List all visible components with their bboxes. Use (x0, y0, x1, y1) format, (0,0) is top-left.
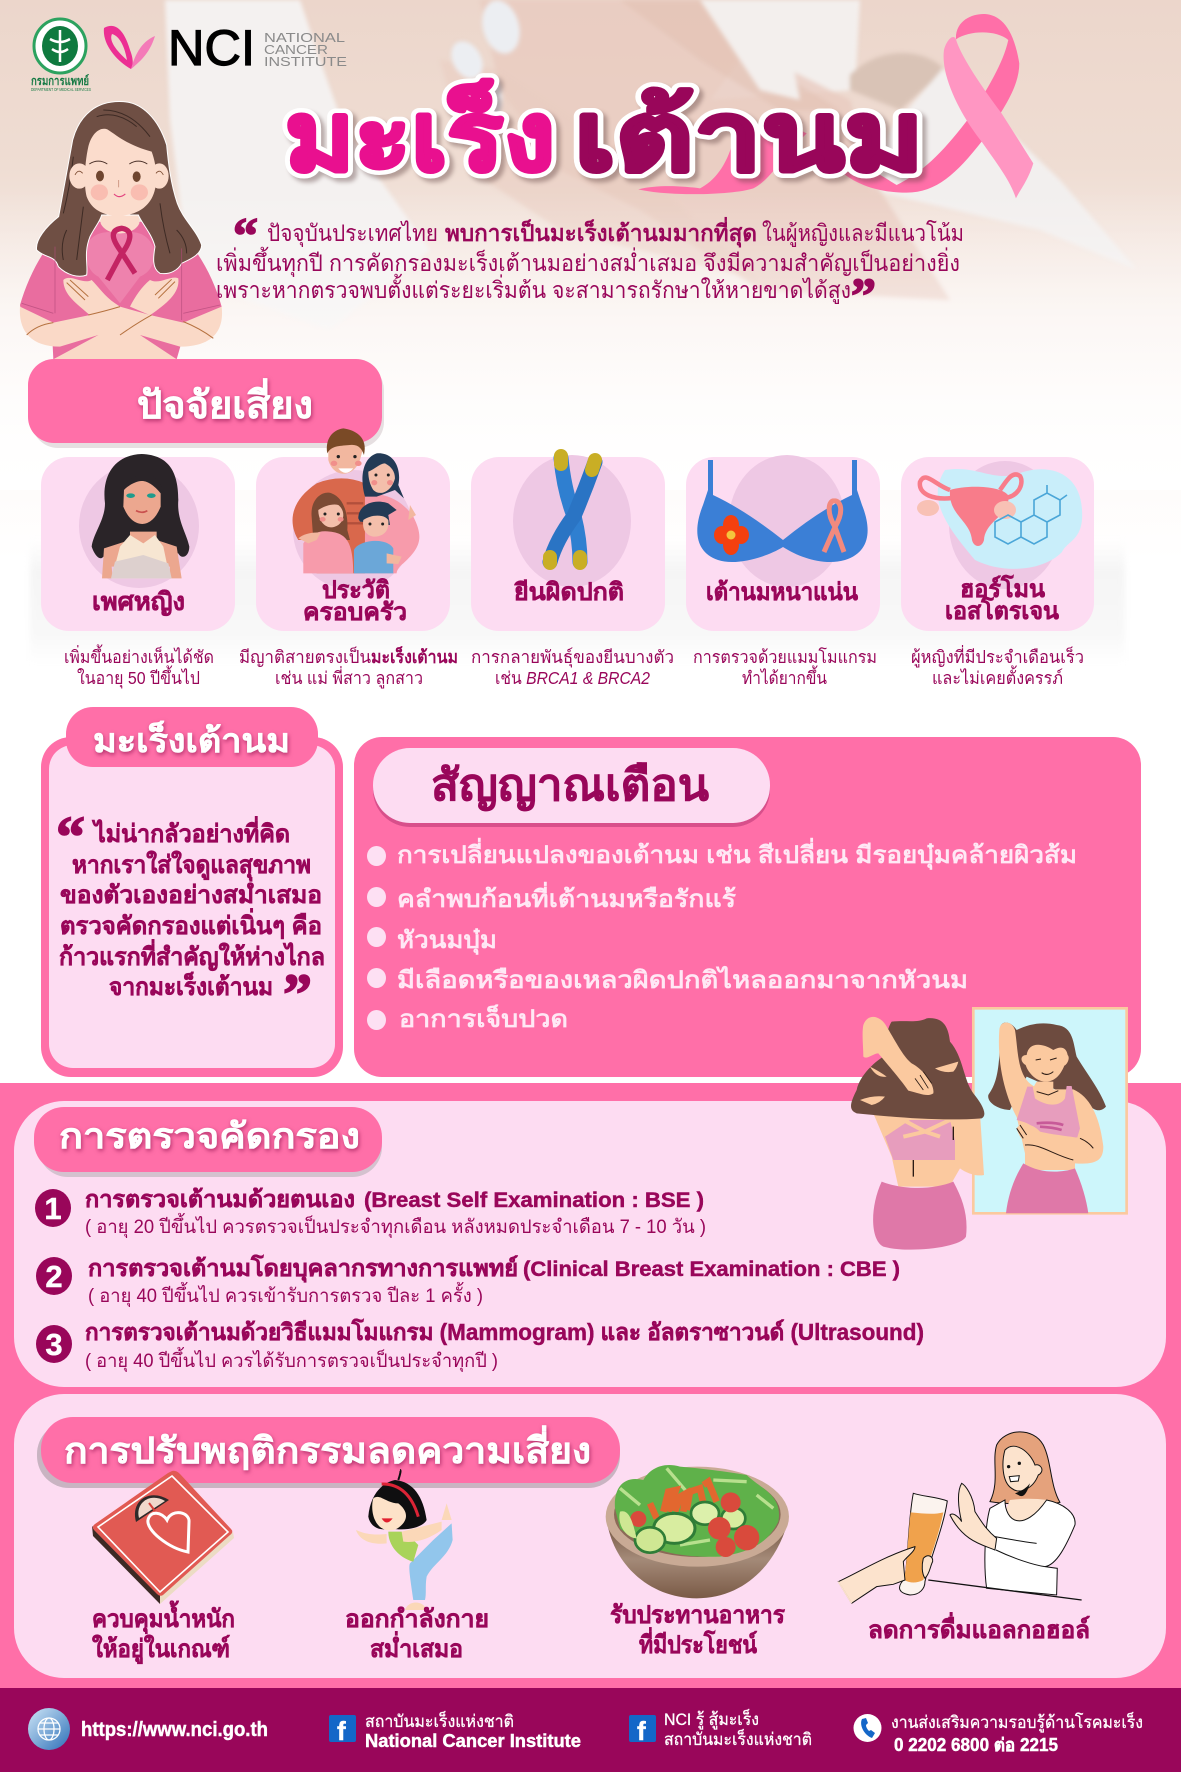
panel: risk card estrogen hormone: ฮอร์โมน (960, 574, 1046, 603)
screening item 1: 1 (44, 1191, 62, 1226)
facebook page 2: NCI รู้ สู้มะเร็ง (664, 1708, 759, 1730)
warning list (367, 837, 1077, 1033)
heading tab (66, 707, 318, 767)
phone contact: งานส่งเสริมความรอบรู้ด้านโรคมะเร็ง (891, 1711, 1143, 1733)
panel: risk card abnormal gene: ยีนผิดปกติ (514, 579, 624, 606)
panel: risk card family history: ครอบครัว (303, 599, 407, 626)
quote text: ไม่น่ากลัวอย่างที่คิด (91, 816, 290, 848)
risk captions: มะเร็งเต้านม (371, 645, 458, 667)
title: มะเร็ง (285, 79, 555, 191)
screening item 2: การตรวจเต้านมโดยบุคลากรทางการแพทย์ (88, 1254, 518, 1283)
lifestyle caption: control weight (92, 1600, 235, 1664)
risk captions: ในอายุ 50 ปีขึ้นไป (77, 665, 200, 689)
lifestyle caption: exercise: ออกกำลังกาย (345, 1606, 489, 1633)
panel: risk card female (41, 454, 235, 631)
logo: NCI National Cancer Institute: NCI (168, 20, 255, 76)
logo: Ministry of Public Health / Department of Medical Services: กรมการแพทย์ (31, 74, 89, 88)
quote text: ” (283, 962, 312, 1027)
icon: pink ribbon (638, 14, 1033, 198)
warning list: คลำพบก้อนที่เต้านมหรือรักแร้ (397, 881, 736, 913)
intro paragraph: พบการเป็นมะเร็งเต้านมมากที่สุด (445, 216, 757, 248)
lifestyle caption: control weight: ควบคุมน้ำหนัก (92, 1600, 235, 1635)
quote text: จากมะเร็งเต้านม (109, 971, 273, 1001)
screening item 1 (35, 1186, 706, 1239)
risk captions: เพิ่มขึ้นอย่างเห็นได้ชัด (64, 644, 214, 667)
title: มะเร็ง (285, 79, 555, 191)
quote text: หากเราใส่ใจดูแลสุขภาพ (72, 850, 311, 881)
warning list: มีเลือดหรือของเหลวผิดปกติไหลออกมาจากหัวนม (397, 965, 968, 994)
title: เต้านม (574, 84, 924, 191)
heading pill (34, 1107, 382, 1177)
facebook page 2 (629, 1708, 812, 1749)
icon: family (293, 428, 419, 573)
intro paragraph: “ (233, 207, 258, 263)
phone contact: 0 2202 6800 ต่อ 2215 (894, 1735, 1058, 1755)
facebook page 1: สถาบันมะเร็งแห่งชาติ (365, 1710, 514, 1731)
warning list: หัวนมบุ๋ม (397, 927, 497, 956)
icon: woman refusing beer (838, 1432, 1082, 1603)
icon: bathroom scale (92, 1471, 234, 1604)
lifestyle caption: healthy food: รับประทานอาหาร (610, 1602, 786, 1629)
risk captions: ทำได้ยากขึ้น (742, 665, 827, 688)
footer (0, 1688, 1181, 1772)
risk captions: การตรวจด้วยแมมโมแกรม (693, 647, 877, 667)
lifestyle caption: exercise (345, 1606, 489, 1663)
icon: girl doing yoga pose (356, 1470, 453, 1610)
lifestyle caption: exercise: สม่ำเสมอ (370, 1631, 463, 1663)
screening item 3 (36, 1318, 924, 1373)
heading pill (373, 748, 770, 827)
logo: NCI National Cancer Institute: CANCER (264, 43, 328, 57)
logo: Ministry of Public Health / Department of Medical Services: DEPARTMENT OF MEDICAL SERVICES (31, 87, 91, 92)
heading pill (37, 1417, 620, 1488)
panel: risk card family history: ประวัติ (322, 577, 390, 604)
screening item 2 (36, 1254, 900, 1308)
facebook page 1 (329, 1710, 581, 1751)
logo: Ministry of Public Health / Department of Medical Services (31, 19, 91, 92)
title: เต้านม (574, 84, 924, 191)
lifestyle caption: control weight: ให้อยู่ในเกณฑ์ (92, 1634, 230, 1664)
screening item 3: การตรวจเต้านมด้วยวิธีแมมโมแกรม (Mammogram) และ อัลตราซาวนด์ (Ultrasound) (85, 1318, 924, 1345)
screening item 3: 3 (45, 1327, 63, 1362)
intro paragraph: ” (851, 267, 876, 323)
panel: screening (14, 1101, 1166, 1387)
facebook page 2: f (637, 1716, 646, 1746)
screening item 2: 2 (45, 1259, 63, 1294)
heading: risk factors: ปัจจัยเสี่ยง (137, 378, 313, 427)
risk captions: การกลายพันธุ์ของยีนบางตัว (471, 647, 674, 668)
panel: risk card estrogen hormone (901, 457, 1094, 631)
screening item 1: การตรวจเต้านมด้วยตนเอง (85, 1186, 355, 1212)
intro paragraph: ปัจจุบันประเทศไทย (267, 220, 438, 247)
warning list: อาการเจ็บปวด (399, 1004, 568, 1033)
logo: NCI National Cancer Institute (104, 20, 347, 76)
icon: chromosome (550, 456, 595, 563)
phone contact (854, 1711, 1143, 1755)
risk captions: มีญาติสายตรงเป็น (239, 646, 371, 667)
heading pill: การปรับพฤติกรรมลดความเสี่ยง (64, 1425, 591, 1471)
icon: uterus and molecule (917, 469, 1082, 569)
intro paragraph: เพิ่มขึ้นทุกปี การคัดกรองมะเร็งเต้านมอย่างสม่ำเสมอ จึงมีความสำคัญเป็นอย่างยิ่ง (216, 247, 960, 277)
risk captions: เช่น แม่ พี่สาว ลูกสาว (275, 666, 423, 689)
quote text: ตรวจคัดกรองแต่เนิ่นๆ คือ (60, 908, 322, 940)
intro paragraph: เพราะหากตรวจพบตั้งแต่ระยะเริ่มต้น จะสามารถรักษาให้หายขาดได้สูง (216, 274, 851, 304)
lifestyle caption: healthy food: ที่มีประโยชน์ (639, 1627, 757, 1659)
panel: risk card dense breast: เต้านมหนาแน่น (706, 579, 859, 606)
screening item 2: (Clinical Breast Examination : CBE ) (523, 1258, 900, 1281)
heading: risk factors (28, 359, 384, 448)
screening item 2: ( อายุ 40 ปีขึ้นไป ควรเข้ารับการตรวจ ปีละ 1 ครั้ง ) (88, 1282, 483, 1308)
website (28, 1708, 268, 1750)
risk captions (64, 644, 1084, 689)
illustration: woman with crossed arms and ribbon (20, 102, 222, 359)
risk captions: เช่น BRCA1 & BRCA2 (495, 668, 650, 688)
title (285, 79, 924, 191)
panel: risk card abnormal gene (471, 455, 665, 631)
panel: risk card female: เพศหญิง (92, 588, 185, 616)
panel: risk card dense breast (686, 455, 880, 631)
intro paragraph: ในผู้หญิงและมีแนวโน้ม (762, 220, 964, 247)
facebook page 1: f (337, 1716, 346, 1746)
heading pill: การตรวจคัดกรอง (59, 1117, 360, 1156)
panel: risk card family history (256, 428, 450, 631)
icon: blue bra with flower and ribbon (697, 460, 868, 562)
quote text (56, 804, 325, 1027)
panel: warning signs (354, 737, 1141, 1077)
panel: breast cancer quote (41, 707, 343, 1077)
heading pill: สัญญาณเตือน (431, 761, 709, 811)
icon: woman portrait (92, 454, 189, 578)
heading tab: มะเร็งเต้านม (93, 720, 290, 759)
quote text: ของตัวเองอย่างสม่ำเสมอ (60, 877, 322, 909)
lifestyle caption: reduce alcohol: ลดการดื่มแอลกอฮอล์ (868, 1612, 1090, 1644)
quote text: “ (56, 804, 85, 869)
screening item 1: (Breast Self Examination : BSE ) (364, 1189, 704, 1212)
warning list: การเปลี่ยนแปลงของเต้านม เช่น สีเปลี่ยน มีรอยบุ๋มคล้ายผิวส้ม (397, 837, 1077, 871)
screening item 3: ( อายุ 40 ปีขึ้นไป ควรได้รับการตรวจเป็นประจำทุกปี ) (85, 1347, 498, 1373)
pink lower background band (0, 1083, 1181, 1689)
screening item 1: ( อายุ 20 ปีขึ้นไป ควรตรวจเป็นประจำทุกเดือน หลังหมดประจำเดือน 7 - 10 วัน ) (85, 1213, 706, 1239)
quote text: ก้าวแรกที่สำคัญให้ห่างไกล (59, 939, 325, 971)
risk captions: ผู้หญิงที่มีประจำเดือนเร็ว (911, 645, 1084, 668)
panel: lifestyle (14, 1394, 1166, 1678)
intro paragraph (216, 207, 964, 323)
illustration: self breast exam, woman and mirror (851, 1008, 1127, 1250)
lifestyle caption: healthy food (610, 1602, 786, 1659)
facebook page 1: National Cancer Institute (365, 1731, 581, 1751)
background photo: hands on breast, faded (0, 0, 1181, 665)
facebook page 2: สถาบันมะเร็งแห่งชาติ (664, 1728, 812, 1749)
risk captions: และไม่เคยตั้งครรภ์ (932, 665, 1063, 688)
website: https://www.nci.go.th (81, 1719, 268, 1741)
icon: salad bowl (606, 1465, 789, 1598)
logo: NCI National Cancer Institute: NATIONAL (264, 31, 345, 45)
panel: risk card estrogen hormone: เอสโตรเจน (945, 596, 1060, 625)
logo: NCI National Cancer Institute: INSTITUTE (264, 55, 347, 69)
